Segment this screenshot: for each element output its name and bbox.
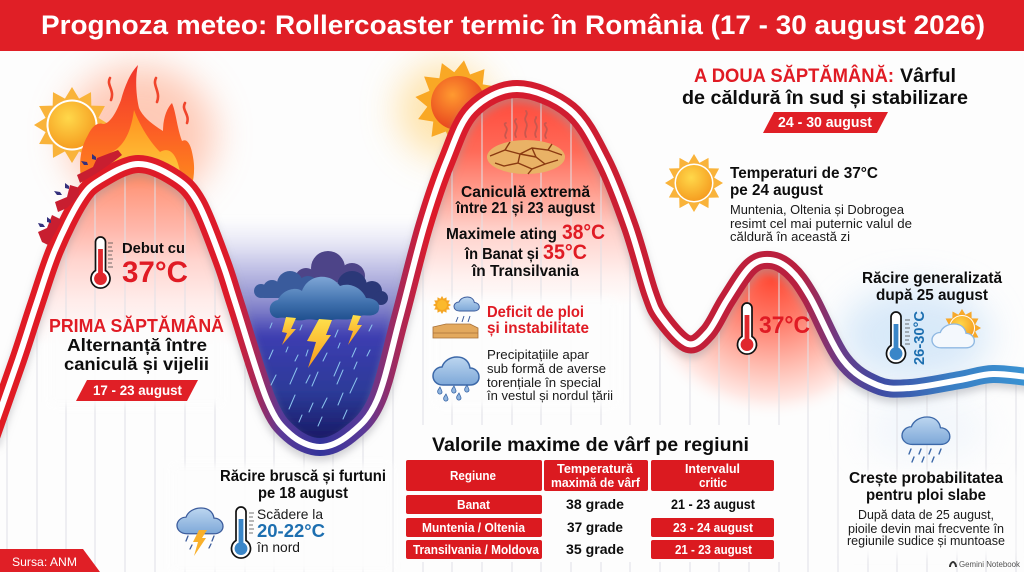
text: temperatures on 24 august: Muntenia, Oltenia și Dobrogea [730, 203, 904, 217]
icon: sun left [34, 87, 110, 163]
text: extreme heat: în Banat și [464, 246, 539, 263]
table header [406, 460, 774, 491]
text: extreme heat: Caniculă extremă [461, 184, 590, 201]
white backings behind text [50, 298, 1015, 572]
table: peak values by region [406, 460, 774, 559]
callout: 37C second week [738, 303, 810, 354]
icon: lightning bolts [282, 315, 362, 368]
heading: second week: Vârful [900, 65, 956, 87]
text: rain probability: După data de 25 august, [858, 508, 994, 522]
icon: storm cloud [254, 251, 388, 321]
icon: cracked earth [487, 140, 565, 174]
text: temperatures on 24 august: Temperaturi de 37°C [730, 165, 878, 182]
heading: rain deficit: și instabilitate [487, 320, 589, 337]
text: extreme heat: 35°C [543, 241, 587, 264]
heading: second week [682, 63, 968, 109]
heading: first week: Alternanță între [67, 335, 207, 355]
text: rain probability: pioile devin mai frecvente în [848, 522, 1004, 536]
text: temperature drop: 20-22°C [257, 521, 325, 541]
header bar [0, 0, 1024, 51]
table header: critic [699, 476, 727, 490]
area fills under the rollercoaster humps [42, 98, 848, 408]
text: precipitation [486, 348, 613, 403]
callout: debut: Debut cu [122, 240, 185, 257]
icon: flames [80, 65, 194, 186]
title: Prognoza meteo: Rollercoaster termic în România (17 - 30 august 2026) [41, 10, 985, 40]
text: rain probability: pentru ploi slabe [866, 487, 986, 504]
callout: debut: 37°C [122, 256, 188, 289]
text: extreme heat: 38°C [562, 221, 605, 244]
text: temperatures on 24 august [730, 165, 912, 244]
table header: Temperatură [557, 462, 634, 476]
text: rain probability [847, 470, 1005, 548]
date tag: second week: 24 - 30 august [778, 115, 872, 131]
icon: sun centre [416, 60, 492, 137]
heading: rain deficit [487, 304, 589, 337]
heading: first week [49, 315, 224, 374]
text: precipitation: Precipitațiile apar [487, 348, 589, 362]
icon: thermometer blue [232, 507, 254, 558]
table row: Muntenia / Oltenia: 37 grade [567, 519, 623, 535]
text: temperature drop [256, 506, 325, 555]
text: temperature drop: în nord [256, 539, 300, 555]
table header: maximă de vârf [551, 476, 641, 490]
table row: Muntenia / Oltenia [406, 518, 774, 537]
text: rain probability: Crește probabilitatea [849, 470, 1003, 487]
text: extreme heat: între 21 și 23 august [455, 200, 595, 217]
heading: second week: A DOUA SĂPTĂMÂNĂ: [694, 63, 894, 87]
text: temperatures on 24 august: pe 24 august [730, 182, 823, 199]
callout: sudden cooling: pe 18 august [258, 485, 348, 502]
callout: debut [91, 237, 188, 289]
callout: 37C second week: 37°C [759, 312, 810, 339]
heading: first week: PRIMA SĂPTĂMÂNĂ [49, 315, 224, 336]
text: extreme heat: în Transilvania [471, 263, 579, 280]
text: temperatures on 24 august: căldură în această zi [730, 230, 850, 244]
table row: Transilvania / Moldova: 35 grade [566, 541, 624, 557]
icon: heat waves [505, 111, 547, 138]
heading: general cooling: Răcire generalizată [862, 270, 1002, 287]
callout: sudden cooling [220, 468, 386, 502]
rollercoaster track [0, 89, 1024, 452]
heading: general cooling: după 25 august [876, 287, 988, 304]
text: precipitation: torențiale în special [487, 376, 601, 390]
watermark: Gemini Notebook [959, 559, 1021, 569]
date tag: first week: 17 - 23 august [93, 382, 182, 398]
stormy valley fill [220, 228, 414, 438]
source tag [0, 549, 100, 572]
table row: Transilvania / Moldova: Transilvania / Moldova [413, 543, 540, 557]
heading: rain deficit: Deficit de ploi [487, 304, 584, 321]
text: temperature drop: Scădere la [257, 506, 323, 522]
icon: thermometer cooling [886, 312, 910, 363]
background glows [65, 62, 990, 460]
date tag: first week [76, 380, 198, 401]
table row: Banat: Banat [457, 498, 491, 512]
text: extreme heat [446, 184, 605, 280]
table row: Banat: 21 - 23 august [671, 496, 755, 512]
heading: general cooling [862, 270, 1002, 304]
table header: Intervalul [685, 462, 740, 476]
icon: light rain cloud [902, 417, 950, 462]
icon: rollercoaster cars [38, 150, 122, 245]
icon: sun right [665, 154, 723, 212]
text: extreme heat: Maximele ating [446, 226, 557, 243]
source tag: Sursa: ANM [12, 555, 77, 569]
date tag: second week [763, 112, 888, 133]
table row: Banat [406, 495, 755, 514]
text: precipitation: sub formă de averse [487, 362, 606, 376]
heading: first week: caniculă și vijelii [64, 354, 209, 374]
heading: second week: de căldură în sud și stabilizare [682, 87, 968, 109]
table row: Muntenia / Oltenia: 23 - 24 august [673, 520, 754, 535]
icon: rain deficit [433, 296, 479, 338]
text: precipitation: în vestul și nordul țării [486, 389, 613, 403]
table row: Muntenia / Oltenia: Muntenia / Oltenia [422, 521, 526, 535]
text: temperatures on 24 august: resimt cel mai puternic valul de [730, 217, 912, 231]
table row: Banat: 38 grade [566, 496, 624, 512]
table header: Regiune [450, 469, 496, 483]
icon: rain cloud [433, 357, 479, 401]
icon: sun behind cloud [932, 309, 981, 348]
table title: Valorile maxime de vârf pe regiuni [432, 434, 749, 456]
temperature range label: 26-30°C [911, 311, 928, 365]
callout: sudden cooling: Răcire bruscă și furtuni [220, 468, 386, 485]
icon: storm cloud small [177, 508, 223, 556]
table row: Transilvania / Moldova: 21 - 23 august [675, 542, 753, 557]
table row: Transilvania / Moldova [406, 540, 774, 559]
rain streaks [269, 323, 372, 426]
text: rain probability: regiunile sudice și muntoase [847, 534, 1005, 548]
